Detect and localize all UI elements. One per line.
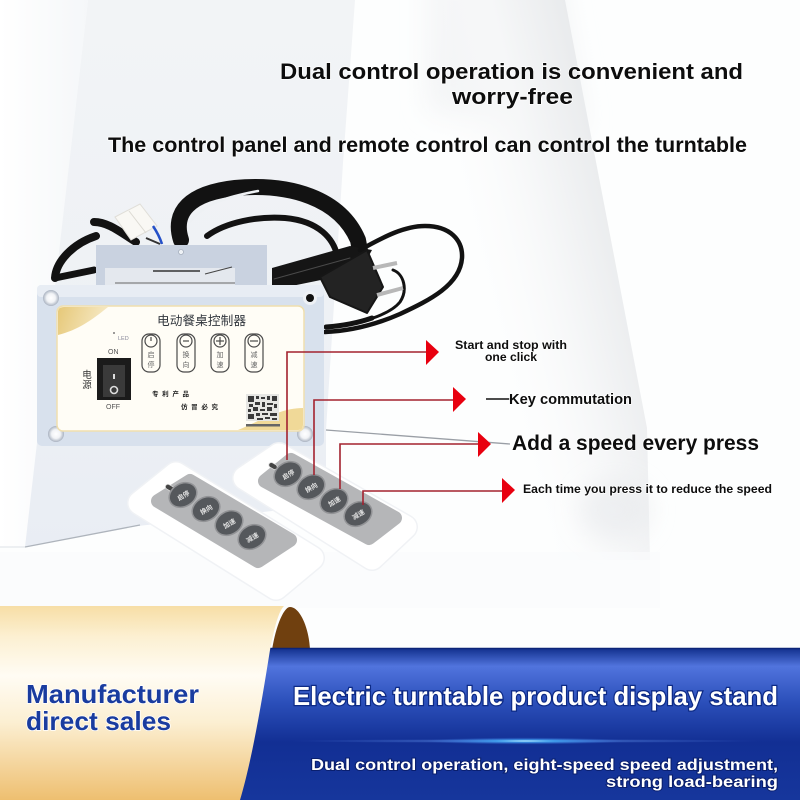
manufacturer label: Manufacturer (26, 679, 199, 709)
power rocker switch (82, 349, 131, 411)
footer: blue banner (238, 648, 800, 800)
qr code (246, 394, 280, 426)
remote control: left (140, 474, 312, 588)
callout arrow: start and stop (287, 340, 439, 460)
panel button captions: 减 (250, 350, 258, 359)
panel slogan: 专利产品 (152, 389, 190, 398)
callout label: reduce speed: Each time you press it to reduce the speed (523, 482, 772, 496)
remote control: right (245, 455, 405, 558)
power rocker switch: OFF (106, 404, 120, 411)
button captions: 换向 (303, 480, 319, 495)
callout label: start and stop (455, 338, 567, 364)
button captions: 加速 (326, 494, 343, 509)
banner description (311, 757, 778, 791)
control panel (37, 285, 324, 446)
title: Dual control operation is convenient and (280, 59, 743, 84)
banner description: Dual control operation, eight-speed speed adjustment, (311, 757, 778, 774)
title (280, 59, 743, 109)
led label (113, 332, 129, 342)
panel button captions: 启 (148, 350, 154, 359)
callout arrow: key commutation (314, 387, 466, 475)
button captions: 减速 (350, 507, 367, 522)
panel slogan: 仿冒必究 (181, 402, 218, 411)
callout arrow: reduce speed (363, 478, 515, 505)
banner description: strong load-bearing (606, 774, 778, 791)
panel button captions: 速 (216, 361, 224, 369)
panel button captions (148, 350, 258, 369)
controller rear box (96, 245, 267, 287)
title: worry-free (451, 84, 573, 109)
manufacturer label (26, 679, 199, 736)
panel button captions: 换 (182, 350, 190, 359)
footer: cream scroll panel (0, 606, 284, 800)
callout label: key commutation: Key commutation (509, 391, 632, 408)
panel button captions: 加 (216, 350, 224, 359)
led label: LED (118, 336, 129, 342)
button captions: 启停 (175, 488, 192, 503)
power rocker switch: 源 (82, 380, 92, 391)
footer: brown arch (272, 607, 310, 650)
buttons (270, 457, 376, 531)
power rocker switch: 电 (82, 369, 92, 381)
button captions: 加速 (221, 516, 238, 531)
subtitle: The control panel and remote control can control the turntable (108, 134, 747, 157)
button captions (280, 467, 367, 522)
panel button captions: 停 (148, 360, 154, 369)
label plate (57, 306, 304, 431)
panel buttons (142, 334, 263, 372)
banner heading: Electric turntable product display stand (293, 681, 778, 711)
callout label: add speed: Add a speed every press (512, 432, 759, 455)
buttons (165, 478, 270, 554)
callout label: start and stop: one click (485, 350, 537, 364)
callout arrow: add speed (340, 432, 491, 489)
panel slogan (152, 389, 218, 411)
panel button captions: 速 (250, 361, 258, 369)
callout label: start and stop: Start and stop with (455, 338, 567, 352)
power cables and plug (55, 187, 462, 332)
button captions: 启停 (280, 467, 297, 482)
button captions: 减速 (244, 530, 261, 545)
manufacturer label: direct sales (26, 706, 171, 736)
power rocker switch: ON (108, 349, 118, 356)
plug blades (373, 263, 403, 295)
wire connector (115, 204, 162, 244)
button captions: 换向 (198, 502, 214, 517)
screws (43, 290, 317, 442)
button captions (175, 488, 261, 545)
panel button captions: 向 (182, 360, 190, 369)
panel heading: 电动餐桌控制器 (157, 313, 246, 328)
